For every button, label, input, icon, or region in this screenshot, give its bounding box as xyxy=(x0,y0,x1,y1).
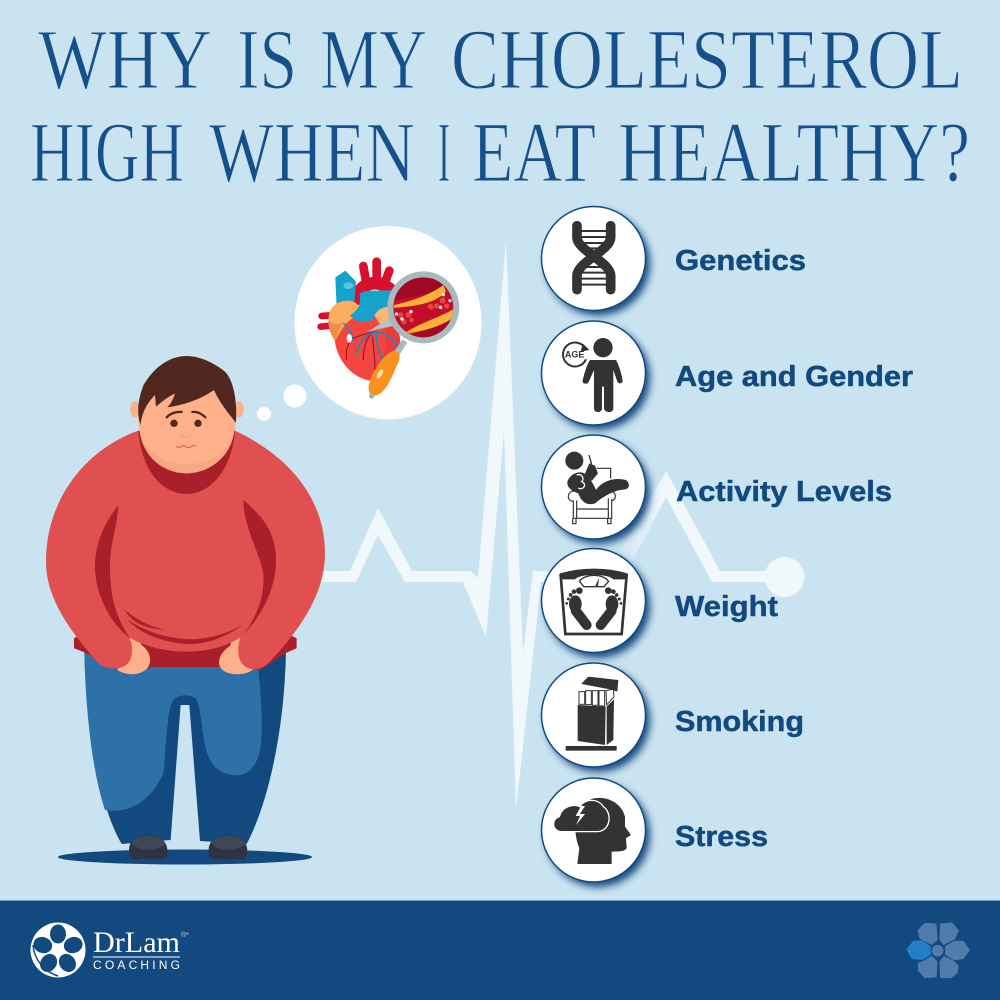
title: WHY xyxy=(38,11,212,107)
pants xyxy=(84,650,286,859)
logo: Dr Lam Coaching: ®* xyxy=(181,931,189,939)
person xyxy=(46,356,325,864)
title: WHEN xyxy=(209,104,415,200)
shoes xyxy=(129,835,247,859)
heartbeat line xyxy=(320,240,804,810)
title: I xyxy=(438,104,450,200)
title xyxy=(30,11,970,200)
logo: Dr Lam Coaching xyxy=(30,922,189,978)
label: Activity Levels: Activity Levels xyxy=(676,476,892,508)
title: HIGH xyxy=(30,104,184,200)
ground shadow xyxy=(58,850,312,864)
icon: sedentary activity xyxy=(542,435,650,544)
logo: Dr Lam Coaching: DrLam xyxy=(93,926,180,959)
label: Age and Gender: Age and Gender xyxy=(675,361,913,393)
icon: age and gender xyxy=(542,321,650,430)
logo: Dr Lam Coaching: COACHING xyxy=(93,958,180,972)
icon: weighing scale xyxy=(542,548,650,658)
label: Stress: Stress xyxy=(675,821,768,853)
icon: stress xyxy=(542,778,650,887)
logo: flower mark xyxy=(907,923,969,977)
icon: heart with magnifier xyxy=(321,262,459,399)
label: Weight: Weight xyxy=(675,591,778,623)
label: Smoking: Smoking xyxy=(675,706,804,738)
label: Genetics: Genetics xyxy=(675,245,806,277)
title: EAT xyxy=(472,104,596,200)
icon: cigarette pack xyxy=(542,663,650,772)
head xyxy=(130,356,244,473)
icon: DNA xyxy=(542,206,650,316)
sweater xyxy=(46,356,325,674)
panel: factor icon circles xyxy=(542,206,650,887)
footer band xyxy=(0,900,1000,1000)
hands xyxy=(117,637,253,674)
icon: age and gender: AGE xyxy=(565,350,584,360)
title: MY xyxy=(320,11,427,107)
thought bubble xyxy=(257,226,482,421)
title: IS xyxy=(237,11,297,107)
